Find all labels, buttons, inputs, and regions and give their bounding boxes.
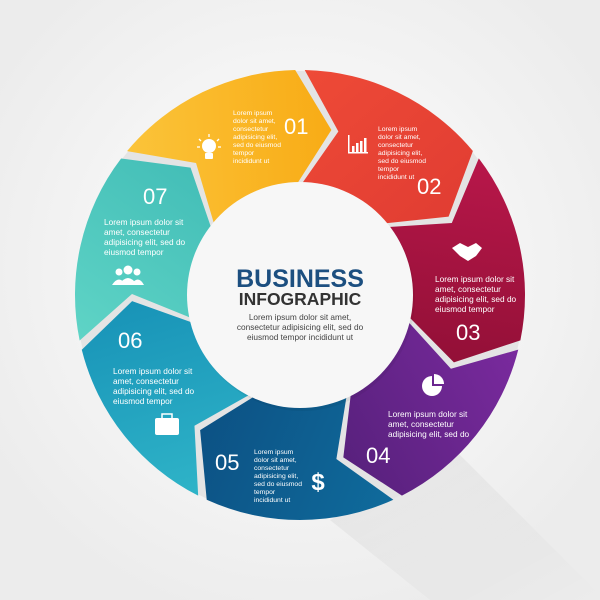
icon: briefcase — [155, 414, 179, 435]
segment 02 — [302, 70, 473, 223]
label 03: eiusmod tempor — [435, 304, 495, 314]
label 02 — [348, 126, 441, 199]
label 01: dolor sit amet, — [233, 118, 276, 125]
long shadow — [330, 454, 600, 600]
icon: pie chart — [422, 374, 444, 396]
center body: Lorem ipsum dolor sit amet, — [249, 312, 351, 322]
label 02: dolor sit amet, — [378, 134, 421, 141]
label 05: adipisicing elit, — [254, 473, 298, 480]
label 02: adipisicing elit, — [378, 150, 422, 157]
label 02: tempor — [378, 166, 400, 173]
label 03: amet, consectetur — [435, 284, 501, 294]
label 05: incididunt ut — [254, 497, 290, 504]
label 05: sed do eiusmod — [254, 481, 302, 488]
center body — [237, 312, 364, 342]
label 02: Lorem ipsum — [378, 126, 418, 133]
label 01 — [197, 110, 308, 165]
label 04: Lorem ipsum dolor sit — [388, 409, 468, 419]
label 02: sed do eiusmod — [378, 158, 426, 165]
label 03: Lorem ipsum dolor sit — [435, 274, 515, 284]
label 03: 03 — [456, 320, 480, 345]
label 01: 01 — [284, 114, 308, 139]
center body: consectetur adipisicing elit, sed do — [237, 322, 364, 332]
icon: handshake — [452, 243, 482, 261]
label 03: adipisicing elit, sed do — [435, 294, 517, 304]
label 05: tempor — [254, 489, 276, 496]
label 06: amet, consectetur — [113, 376, 179, 386]
center body: eiusmod tempor incididunt ut — [247, 332, 354, 342]
label 01: tempor — [233, 150, 255, 157]
label 04: 04 — [366, 443, 390, 468]
label 05: Lorem ipsum — [254, 449, 294, 456]
label 04: amet, consectetur — [388, 419, 454, 429]
label 04 — [366, 374, 470, 468]
label 01: incididunt ut — [233, 158, 269, 165]
label 01: consectetur — [233, 126, 269, 133]
label 04: adipisicing elit, sed do — [388, 429, 470, 439]
segment 03 — [358, 157, 584, 385]
label 07 — [104, 184, 186, 285]
segment 06 — [47, 285, 267, 497]
label 06: adipisicing elit, sed do — [113, 386, 195, 396]
label 06: eiusmod tempor — [113, 396, 173, 406]
label 01: adipisicing elit, — [233, 134, 277, 141]
label 02: incididunt ut — [378, 174, 414, 181]
label 05: 05 — [215, 450, 239, 475]
label 02: 02 — [417, 174, 441, 199]
label 02: consectetur — [378, 142, 414, 149]
icon: bar chart — [348, 135, 368, 154]
label 07: adipisicing elit, sed do — [104, 237, 186, 247]
center subtitle: INFOGRAPHIC — [239, 289, 362, 309]
label 07: Lorem ipsum dolor sit — [104, 217, 184, 227]
segment 01 — [126, 20, 352, 248]
label 06 — [113, 328, 195, 435]
label 06: 06 — [118, 328, 142, 353]
label 05: dolor sit amet, — [254, 457, 297, 464]
label 07: eiusmod tempor — [104, 247, 164, 257]
segment 07 — [42, 142, 230, 343]
icon: people — [112, 266, 144, 285]
icon: dollar: $ — [311, 469, 325, 496]
label 06: Lorem ipsum dolor sit — [113, 366, 193, 376]
segment 04 — [331, 313, 519, 514]
segment 05 — [175, 361, 395, 573]
label 07: 07 — [143, 184, 167, 209]
icon: bulb — [197, 134, 221, 159]
center title: BUSINESS — [236, 265, 364, 293]
label 05 — [215, 449, 325, 504]
center circle — [187, 182, 415, 411]
label 01: Lorem ipsum — [233, 110, 273, 117]
label 07: amet, consectetur — [104, 227, 170, 237]
label 03 — [435, 243, 517, 345]
label 01: sed do eiusmod — [233, 142, 281, 149]
label 05: consectetur — [254, 465, 290, 472]
